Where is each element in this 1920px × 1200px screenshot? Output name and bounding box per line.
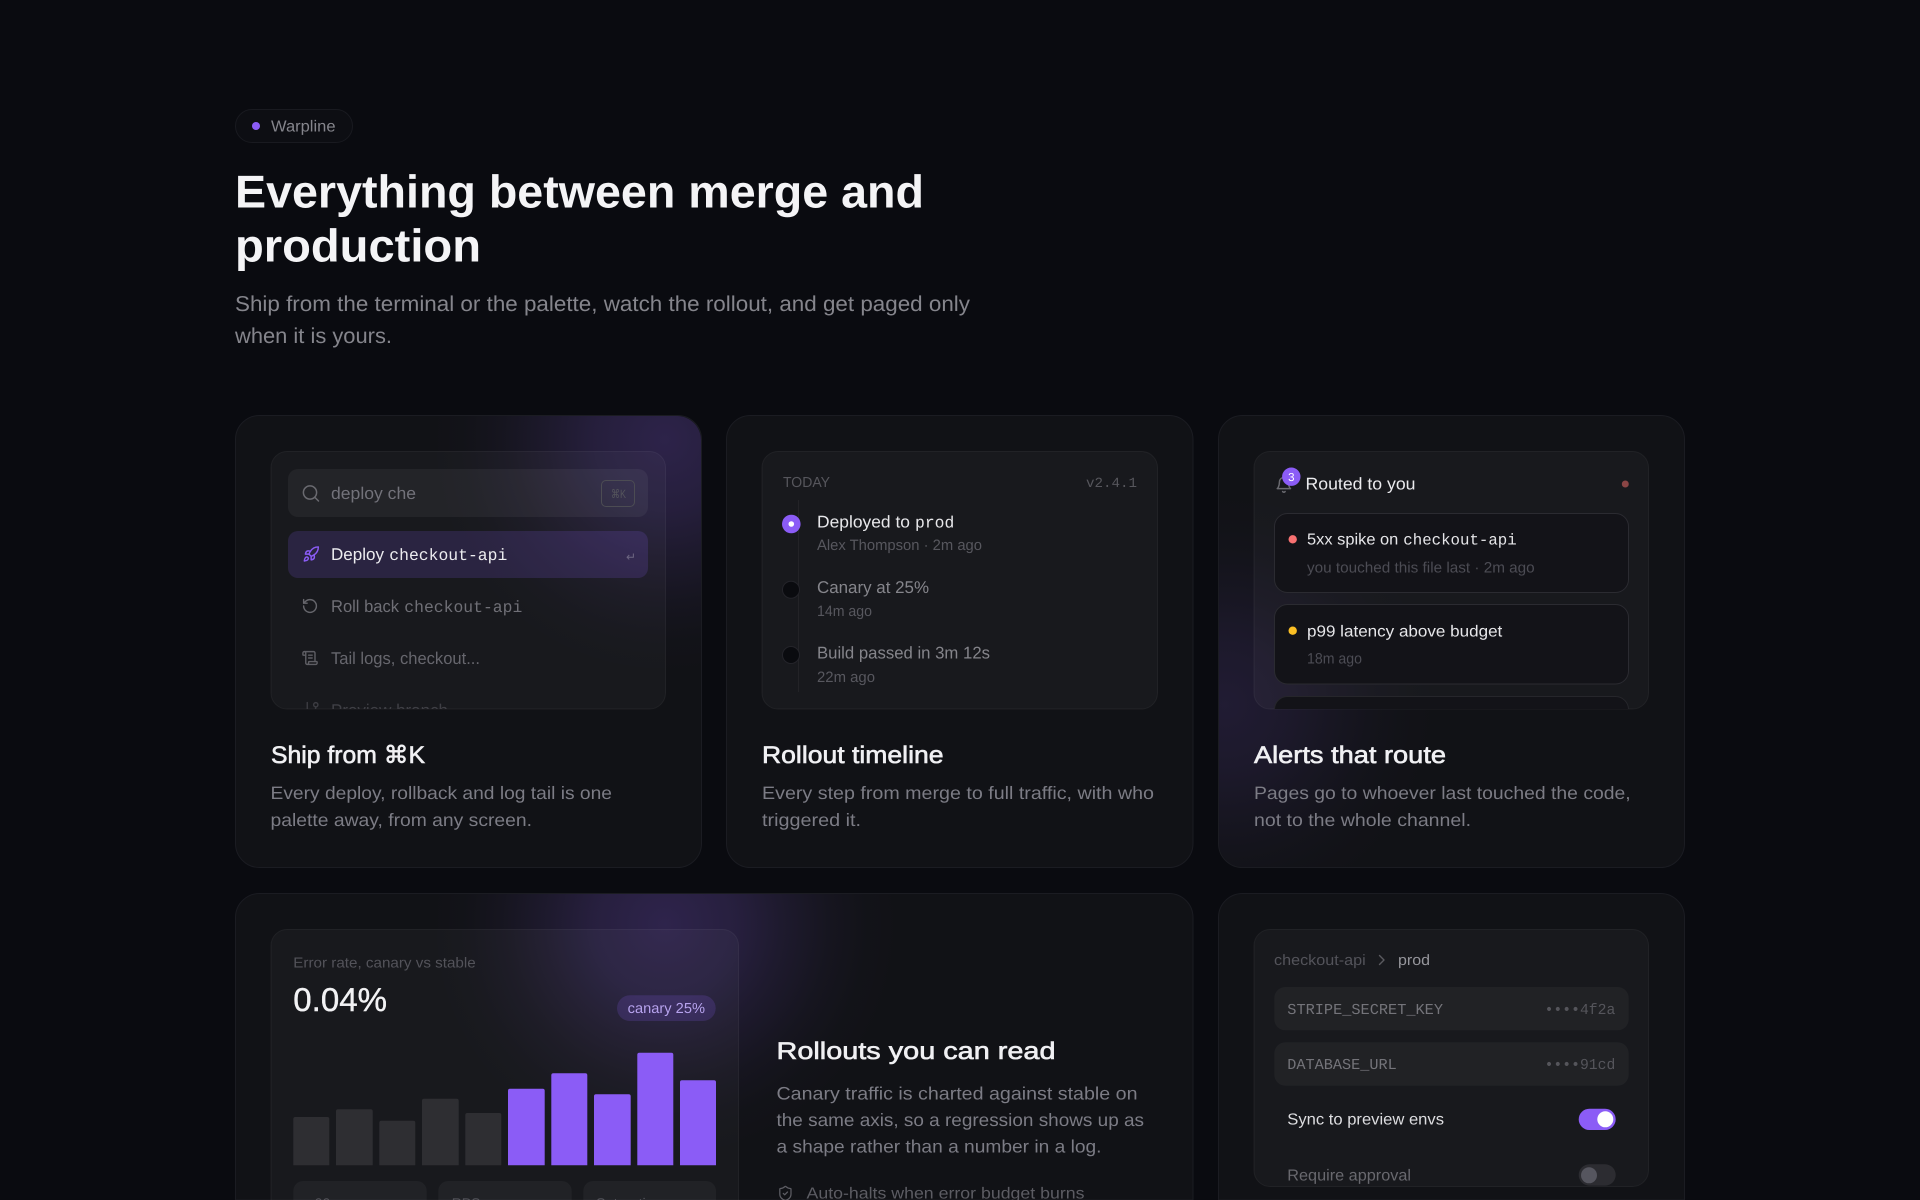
card heading: Alerts that route — [1254, 742, 1446, 769]
title — [235, 166, 924, 272]
subtitle: Ship from the terminal or the palette, watch the rollout, and get paged only — [235, 292, 970, 316]
panel: Rollouts you can read — [236, 894, 1193, 1200]
breadcrumb: prod — [1398, 952, 1430, 969]
title: Everything between merge and — [235, 166, 924, 218]
alert: 5xx spike — [1274, 514, 1628, 592]
badge: Warpline — [236, 110, 352, 142]
alert: 5xx spike: you touched this file last · 2m ago — [1307, 560, 1535, 576]
card description: a shape rather than a number in a log. — [776, 1137, 1102, 1157]
alert: 5xx spike: 5xx spike on — [1307, 532, 1398, 548]
step: deployed: Alex Thompson · 2m ago — [817, 537, 982, 554]
alerts preview — [1254, 451, 1649, 710]
row: roll back — [302, 598, 522, 616]
search field — [288, 469, 648, 517]
secret: database: ••••91cd — [1545, 1056, 1615, 1074]
panel: Rollout timeline — [726, 416, 1193, 868]
alert: p99 latency: 18m ago — [1307, 650, 1362, 668]
search field: ⌘K — [611, 487, 626, 501]
card heading: Rollout timeline — [762, 742, 944, 769]
card description: Pages go to whoever last touched the code, — [1254, 783, 1631, 803]
timeline preview — [762, 452, 1158, 709]
step: deployed: prod — [915, 514, 954, 532]
alert: p99 latency — [1274, 604, 1628, 684]
row: roll back: Roll back — [331, 597, 399, 616]
card description: the same axis, so a regression shows up as — [776, 1110, 1144, 1130]
card description: triggered it. — [762, 810, 861, 830]
toggle row: sync — [1287, 1109, 1616, 1130]
stat tiles — [293, 1181, 716, 1200]
subtitle — [234, 292, 970, 348]
selected row: deploy — [288, 531, 648, 578]
panel: Alerts that route — [1218, 416, 1684, 868]
card description: not to the whole channel. — [1254, 810, 1471, 830]
title: production — [235, 220, 481, 272]
secret: database: DATABASE_URL — [1287, 1056, 1397, 1074]
secret: stripe — [1274, 987, 1629, 1030]
settings preview — [1254, 930, 1648, 1186]
step: canary: Canary at 25% — [817, 578, 929, 597]
icon: bell with badge: 3 — [1288, 472, 1295, 484]
step: canary: 14m ago — [817, 603, 872, 620]
row: preview branch — [306, 702, 447, 709]
card heading: Rollouts you can read — [776, 1038, 1056, 1065]
card description: Canary traffic is charted against stable on — [776, 1083, 1138, 1103]
alert: 5xx spike: checkout-api — [1403, 532, 1517, 550]
selected row: deploy: ↵ — [626, 550, 636, 564]
card description — [776, 1083, 1144, 1157]
secret: stripe: ••••4f2a — [1545, 1001, 1615, 1019]
header — [234, 110, 970, 348]
breadcrumb: checkout-api — [1274, 952, 1366, 969]
chart preview — [271, 930, 738, 1200]
card description — [762, 783, 1154, 830]
step: build: Build passed in 3m 12s — [817, 644, 990, 663]
subtitle: when it is yours. — [234, 324, 392, 348]
panel: secrets and settings — [1218, 894, 1684, 1200]
chart preview: Error rate, canary vs stable — [293, 956, 476, 972]
pill: canary: canary 25% — [628, 1001, 705, 1017]
alert: p99 latency: p99 latency above budget — [1307, 623, 1503, 640]
secret: database — [1274, 1042, 1629, 1086]
badge: Warpline: Warpline — [271, 118, 336, 136]
step: build — [782, 644, 990, 686]
command palette preview — [271, 452, 666, 720]
step: canary — [782, 578, 929, 620]
toggle row: approval — [1287, 1164, 1616, 1186]
search field: deploy che — [331, 484, 416, 503]
toggle row: approval: Require approval — [1287, 1168, 1411, 1185]
card description: Every deploy, rollback and log tail is one — [270, 783, 612, 803]
panel: Ship from command K — [236, 416, 702, 868]
selected row: deploy: Deploy — [331, 545, 384, 564]
icon: bell with badge — [1277, 468, 1301, 492]
step: deployed: Deployed to — [817, 512, 910, 532]
breadcrumb — [1274, 954, 1429, 968]
pill: canary — [617, 995, 716, 1021]
card description — [1254, 783, 1631, 830]
alert: clipped third — [1274, 696, 1629, 709]
alerts preview: Routed to you — [1306, 474, 1416, 493]
secret: stripe: STRIPE_SECRET_KEY — [1287, 1001, 1443, 1019]
card description: Every step from merge to full traffic, with who — [762, 783, 1154, 803]
timeline preview: TODAY — [783, 475, 830, 491]
selected row: deploy: checkout-api — [389, 546, 507, 565]
toggle row: sync: Sync to preview envs — [1287, 1112, 1444, 1129]
step: build: 22m ago — [817, 669, 875, 686]
card description — [270, 783, 612, 830]
bar chart — [293, 1053, 716, 1165]
row: tail logs: Tail logs, checkout... — [331, 649, 480, 668]
row: roll back: checkout-api — [404, 598, 522, 617]
row: preview branch: Preview branch — [331, 701, 448, 720]
step: deployed — [782, 512, 982, 554]
metric: error rate: 0.04% — [293, 981, 387, 1018]
card heading: Ship from ⌘K — [271, 742, 425, 769]
card description: palette away, from any screen. — [270, 810, 532, 830]
timeline preview: v2.4.1 — [1086, 476, 1137, 492]
